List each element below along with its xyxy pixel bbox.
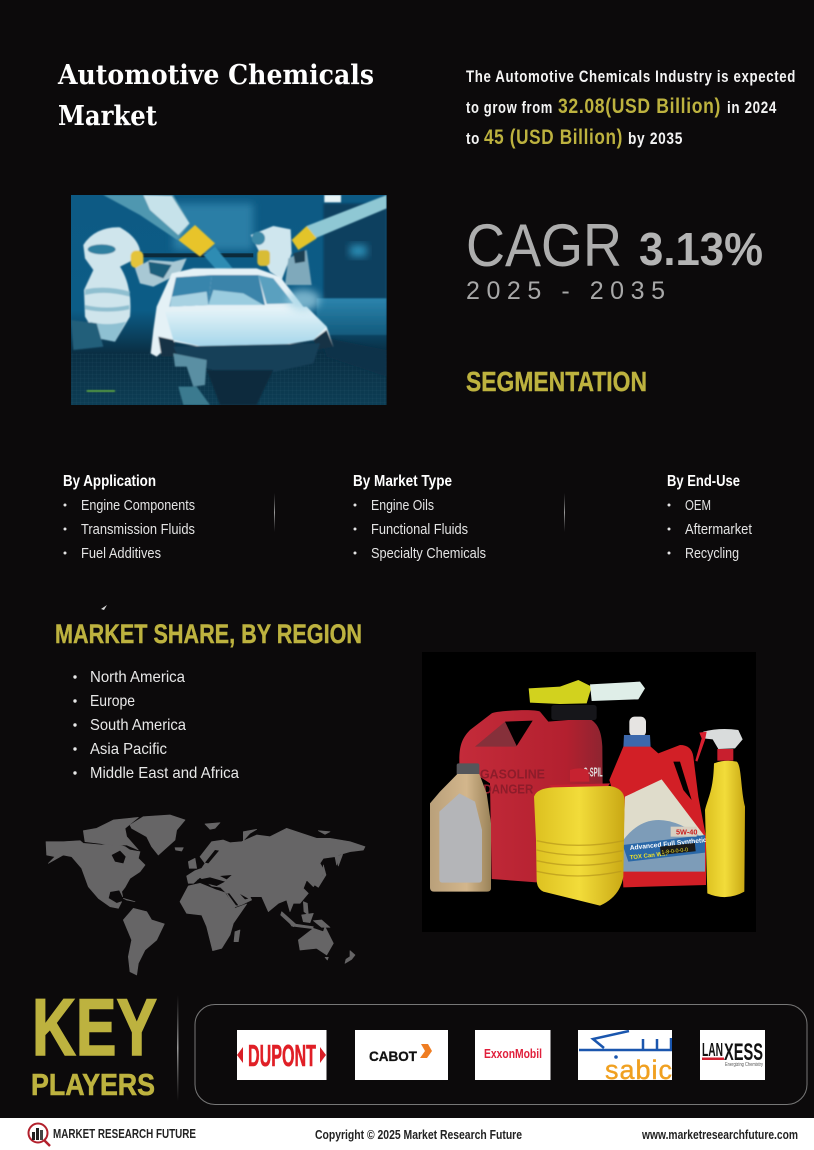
key players heading: [31, 983, 157, 1102]
title: [57, 60, 374, 132]
logo: Cabot: CABOT: [369, 1048, 417, 1064]
CAGR figure: 3.13%: [639, 223, 763, 275]
region list: North America: [90, 669, 185, 686]
segment: by market type: By Market Type: [353, 473, 452, 490]
segment: by application: Transmission Fluids: [81, 522, 195, 538]
logo: ExxonMobil: ExxonMobil: [484, 1047, 542, 1061]
logo: SABIC: sabic: [605, 1055, 672, 1085]
segment: by application: Engine Components: [81, 498, 195, 514]
logo: Lanxess: Energizing Chemistry: [725, 1062, 763, 1068]
key players heading: KEY: [32, 983, 157, 1073]
segment: by market type: Functional Fluids: [371, 522, 468, 538]
footer: Copyright © 2025 Market Research Future: [315, 1127, 522, 1142]
photo: chemical containers: [422, 652, 756, 932]
photo: robots spraying car body: [71, 195, 387, 405]
logo: SABIC: [578, 1030, 672, 1085]
CAGR figure: 2025 - 2035: [466, 277, 665, 305]
red gasoline can: DANGER: [483, 781, 534, 796]
market size summary text: 32.08(USD Billion): [558, 94, 721, 118]
red motor oil jug: Advanced Full Synthetic: [629, 837, 707, 852]
red gasoline can: GASOLINE: [480, 766, 545, 781]
segment: by application: [63, 473, 195, 562]
logo: Cabot: [355, 1030, 448, 1080]
red motor oil jug: 5W-40: [676, 827, 697, 836]
segmentation heading: SEGMENTATION: [466, 366, 647, 397]
logo: DuPont: [237, 1030, 326, 1080]
market share heading: MARKET SHARE, BY REGION: [55, 619, 362, 649]
market size summary text: in 2024: [727, 99, 777, 117]
segment: by market type: Engine Oils: [371, 498, 434, 514]
yellow square container: [534, 768, 625, 906]
region list: South America: [90, 717, 186, 734]
key players heading: PLAYERS: [31, 1067, 155, 1102]
logo: Lanxess: XESS: [724, 1039, 763, 1066]
region list: Europe: [90, 693, 135, 710]
logo: Lanxess: [700, 1030, 765, 1080]
market size summary text: by 2035: [628, 130, 683, 148]
yellow spray bottle: [695, 729, 745, 897]
key players panel: [195, 1004, 807, 1104]
segment: by market type: Specialty Chemicals: [371, 546, 486, 562]
red gasoline can: [459, 680, 645, 882]
segment: by end-use: OEM: [685, 498, 711, 514]
red motor oil jug: [609, 717, 707, 887]
market size summary text: to: [466, 130, 480, 148]
region list: Middle East and Africa: [90, 765, 239, 782]
segment: by application: By Application: [63, 473, 156, 490]
segment: by end-use: Recycling: [685, 546, 739, 562]
segment: by application: Fuel Additives: [81, 546, 161, 562]
title: Automotive Chemicals: [57, 60, 374, 91]
segment: by end-use: By End-Use: [667, 473, 740, 490]
red gasoline can: O-SPIL: [583, 766, 603, 780]
title: Market: [58, 101, 157, 132]
segment: by end-use: [667, 473, 752, 562]
logo: ExxonMobil: [475, 1030, 550, 1080]
footer: [0, 1118, 814, 1150]
region list: [73, 669, 239, 782]
segment: by end-use: Aftermarket: [685, 522, 752, 538]
world map: [46, 815, 365, 975]
logo: Lanxess: LAN: [702, 1040, 723, 1060]
region list: Asia Pacific: [90, 741, 167, 758]
tan oil bottle: [430, 763, 491, 892]
market size summary text: [466, 68, 796, 149]
CAGR figure: CAGR: [466, 212, 622, 279]
market size summary text: 45 (USD Billion): [484, 125, 623, 149]
market size summary text: to grow from: [466, 99, 553, 117]
red motor oil jug: TOX Can Win: [630, 851, 668, 861]
CAGR figure: [466, 212, 763, 305]
icon: market research future logo: [28, 1124, 50, 1146]
logo: DuPont: DUPONT: [248, 1038, 316, 1073]
footer: MARKET RESEARCH FUTURE: [53, 1126, 196, 1141]
segment: by market type: [353, 473, 486, 562]
red motor oil jug: 1-8-0-0-0-0: [661, 847, 688, 856]
